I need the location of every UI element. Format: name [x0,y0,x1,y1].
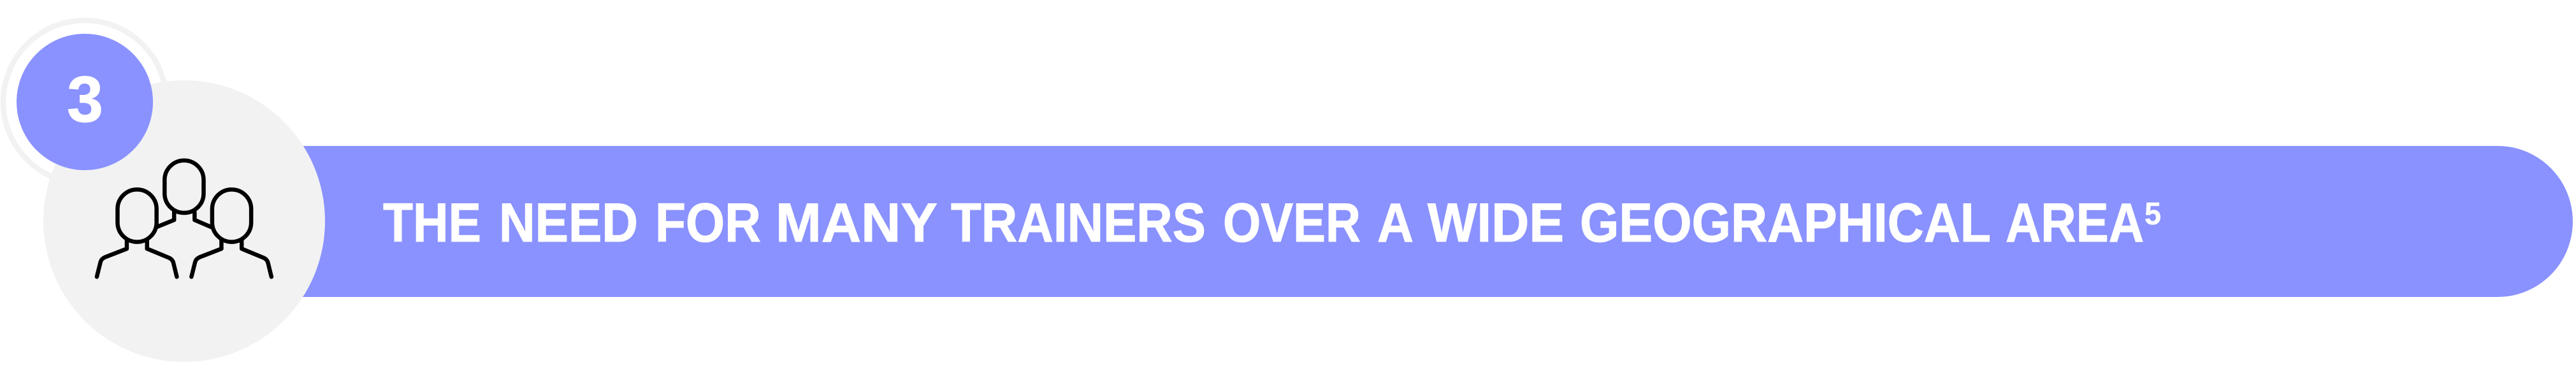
footnote reference: 5 [2145,197,2161,231]
icon: centre person [157,161,212,228]
heading: NEED [499,192,638,254]
heading: GEOGRAPHICAL [1580,192,1991,254]
icon background circle [43,80,325,362]
heading: A [1377,192,1414,254]
heading: OVER [1223,192,1361,254]
heading: AREA [2006,192,2144,254]
heading: THE [383,192,481,254]
number badge outer ring [3,20,166,184]
heading: FOR [655,192,761,254]
banner bar [255,146,2573,297]
icon: left person [97,189,177,277]
heading: MANY [776,192,937,254]
number badge: 3 [67,63,103,136]
number badge [17,34,153,170]
heading: TRAINERS [951,192,1206,254]
heading [383,192,2161,254]
heading: WIDE [1428,192,1564,254]
icon: right person [191,189,271,277]
icon: three people [97,161,271,277]
